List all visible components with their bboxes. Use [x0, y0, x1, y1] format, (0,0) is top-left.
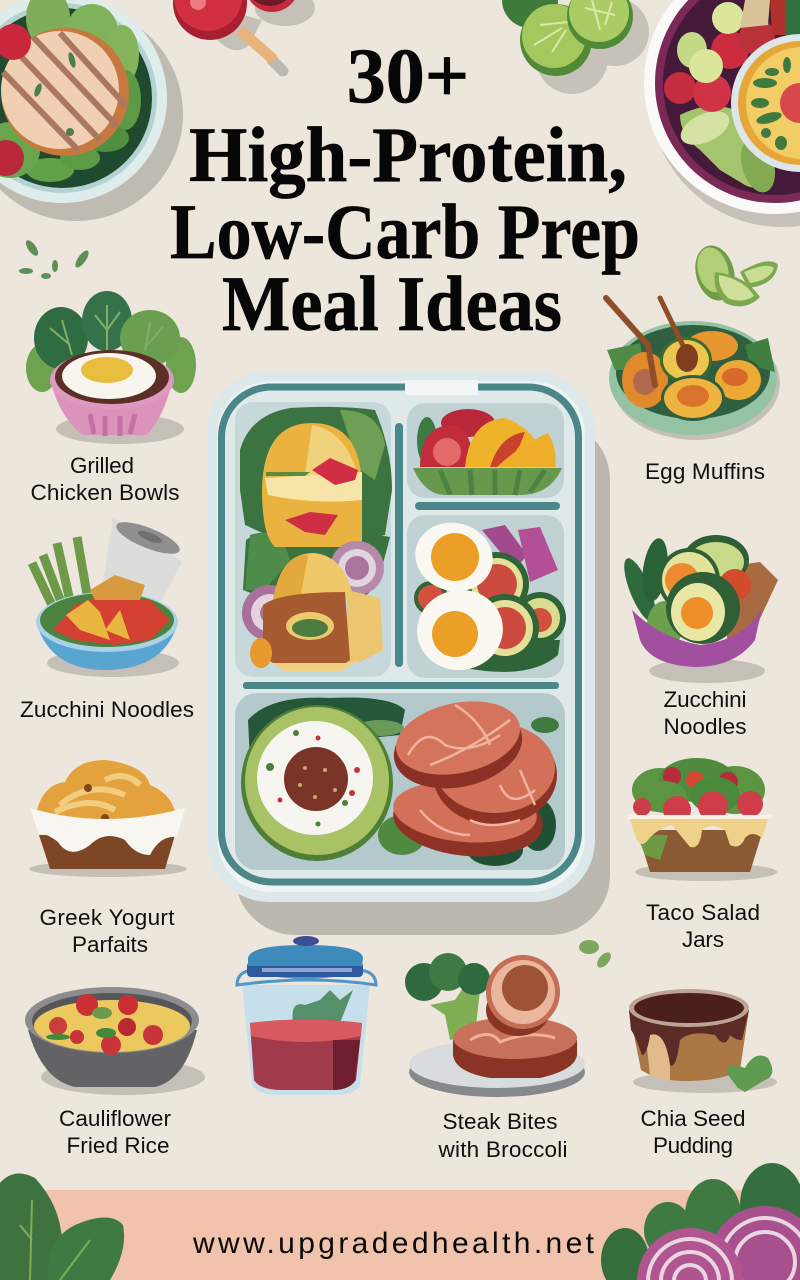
label: Pudding: [653, 1133, 733, 1158]
icon: chia seed pudding: [629, 989, 777, 1093]
compartment: left: [235, 402, 392, 677]
title: Low-Carb Prep: [170, 188, 640, 275]
title: [170, 32, 640, 347]
compartment: right top: [407, 403, 564, 498]
title: High-Protein,: [189, 111, 627, 198]
label: Noodles: [664, 714, 746, 739]
icon: steak bites with broccoli: [405, 953, 585, 1097]
icon: small leaves: [579, 940, 614, 970]
label: with Broccoli: [438, 1137, 568, 1162]
icon: top-right salad bowl: [644, 0, 800, 227]
label: Egg Muffins: [645, 459, 765, 484]
label: Fried Rice: [66, 1133, 170, 1158]
icon: bottom-left leaves: [0, 1174, 124, 1280]
icon: taco salad: [628, 758, 777, 881]
icon: zucchini bowl right: [618, 535, 778, 683]
icon: cauliflower fried rice pan: [25, 987, 205, 1095]
label: Chicken Bowls: [30, 480, 180, 505]
icon: zucchini noodles bowl left: [32, 516, 183, 677]
icon: grilled chicken bowl: [26, 291, 196, 444]
footer url: www.upgradedhealth.net: [192, 1227, 595, 1260]
icon: leaves near left: [19, 238, 91, 279]
label: Zucchini: [664, 687, 746, 712]
compartment: bottom: [235, 691, 565, 870]
label: Grilled: [70, 453, 134, 478]
icon: top limes: [502, 0, 649, 94]
label: Parfaits: [72, 932, 148, 957]
icon: egg muffins plate: [606, 298, 780, 440]
label: Greek Yogurt: [40, 905, 175, 930]
icon: top tomatoes on skewer: [173, 0, 315, 71]
label: Jars: [682, 927, 724, 952]
icon: bottom-right leaves and onion: [601, 1163, 800, 1280]
label: Taco Salad: [646, 900, 760, 925]
footer band: [0, 1190, 800, 1280]
compartment: right bottom: [407, 514, 566, 678]
label: Zucchini Noodles: [20, 697, 194, 722]
label: Chia Seed: [640, 1106, 746, 1131]
icon: top-left chicken salad plate: [0, 0, 183, 221]
icon: limes right: [689, 241, 778, 306]
icon: jar with lid: [237, 936, 376, 1095]
icon: meal prep container: [207, 371, 610, 935]
icon: greek yogurt parfait: [29, 760, 187, 877]
label: Steak Bites: [442, 1109, 558, 1134]
title: 30+: [347, 32, 469, 119]
title: Meal Ideas: [222, 260, 562, 347]
label: Cauliflower: [59, 1106, 172, 1131]
